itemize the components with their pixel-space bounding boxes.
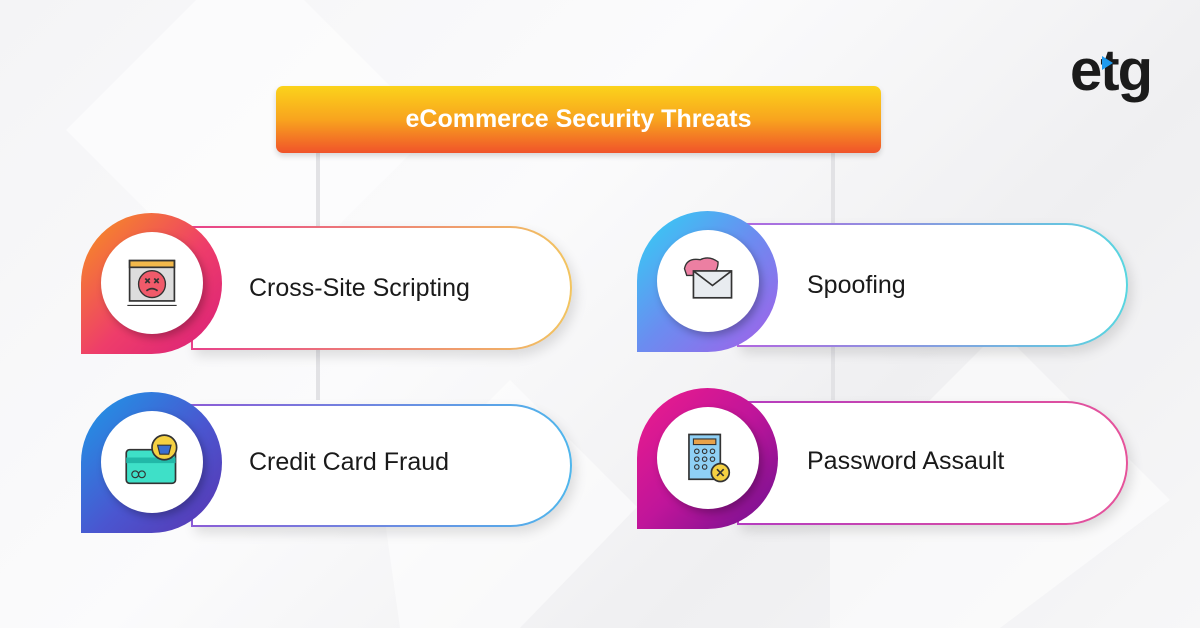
title: eCommerce Security Threats [406,105,751,133]
icon: spoof mail [637,211,778,352]
label: Credit Card Fraud [249,448,449,476]
card: Cross-Site Scripting [81,213,579,360]
card: Password Assault [637,388,1135,534]
card: Spoofing [637,211,1135,356]
logo: etg [1070,38,1151,103]
title [276,86,881,153]
icon: credit card [81,392,222,533]
icon: browser error [81,213,222,354]
label: Cross-Site Scripting [249,274,470,302]
label: Spoofing [807,271,906,299]
label: Password Assault [807,447,1004,475]
card: Credit Card Fraud [81,392,579,536]
icon: keypad [637,388,778,529]
